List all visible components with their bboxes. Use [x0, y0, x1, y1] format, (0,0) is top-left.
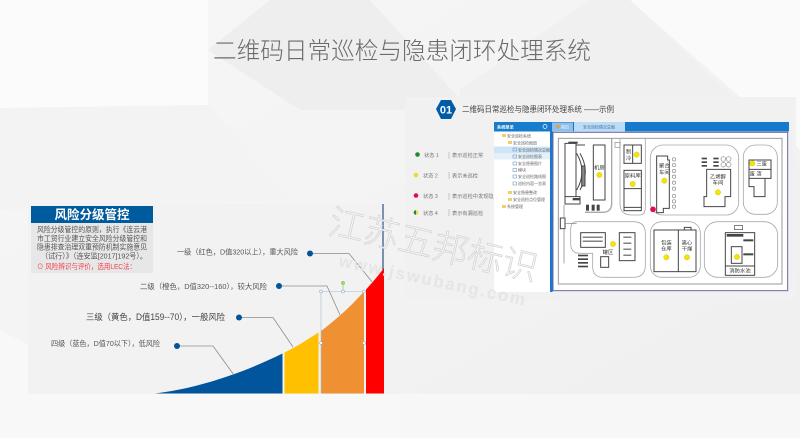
panel: risk grading — [28, 204, 388, 394]
map: plant layout: 冷 — [626, 154, 632, 162]
map: plant layout — [553, 132, 788, 291]
map: plant layout: 车间 — [713, 179, 723, 187]
sidebar: system menu: 安全巡检情况总图 — [518, 146, 550, 152]
map: plant layout: 三废 — [756, 159, 768, 167]
map: plant layout: 原料库 — [625, 172, 641, 180]
segment: blue level 4 — [155, 354, 282, 394]
tab bar: 安全巡检情况总图 — [583, 124, 615, 130]
heading: risk grading: 风险分级管控 — [54, 207, 130, 222]
text block: risk grading policy: 市工贸行业建立安全风险分级管控和 — [37, 233, 147, 243]
sidebar: system menu: 安全巡检点位管理 — [513, 196, 545, 202]
legend item 2: 表示未巡检 — [452, 172, 478, 180]
map: plant layout: 废 渣 — [750, 169, 762, 177]
sidebar: system menu: 模块 — [518, 166, 526, 172]
legend: status — [414, 151, 499, 217]
text block: risk grading policy: （试行）》（连安监[2017]192号）。 — [41, 250, 147, 260]
tanks — [672, 158, 676, 161]
callout: level 4: 四级（蓝色，D值70以下），低风险 — [51, 339, 161, 348]
sidebar: system menu: 安全隐患图片 — [518, 160, 542, 166]
tab bar — [550, 122, 789, 292]
legend item 3: 表示巡检中发现隐患 — [452, 192, 499, 200]
badge: 01: 01 — [440, 104, 452, 116]
map: plant layout: 包装 — [661, 238, 672, 246]
legend item 1: 表示巡检正常 — [452, 151, 483, 159]
panel: system example — [405, 97, 796, 300]
legend item 4: 状态 4 — [423, 209, 438, 217]
chart: risk curve — [155, 268, 384, 394]
sidebar: system menu: 系统管理 — [507, 203, 523, 209]
heading: example: 二维码日常巡检与隐患闭环处理系统 ——示例 — [462, 104, 614, 114]
map: plant layout: 车间 — [659, 168, 670, 176]
segment: orange level 2 — [321, 292, 364, 394]
callout: level 3: 三级（黄色，D值159--70），一般风险 — [86, 311, 225, 322]
sidebar: system menu — [494, 122, 550, 292]
map: plant layout: 离心 — [682, 238, 693, 246]
selection handles — [320, 281, 365, 393]
callout: level 2: 二级（橙色，D值320--160），较大风险 — [140, 282, 268, 291]
callout: level 2 — [140, 282, 340, 315]
map: plant layout: 制 — [626, 148, 631, 156]
title: 二维码日常巡检与隐患闭环处理系统 — [213, 38, 591, 65]
sidebar: system menu: 系统菜单 — [497, 124, 514, 130]
legend item 4: 表示有漏巡检 — [452, 209, 483, 217]
sidebar: system menu: 安全巡检图册 — [513, 140, 537, 146]
badge: 01 — [436, 100, 456, 119]
details — [568, 142, 578, 144]
text block: risk grading policy — [31, 223, 153, 273]
map: plant layout: 罐区 — [603, 248, 614, 256]
callout: level 1 — [177, 248, 373, 283]
legend item 1 — [415, 151, 483, 159]
callout: level 4 — [51, 339, 234, 375]
inspection points — [597, 172, 602, 178]
legend item 3: 状态 3 — [423, 192, 438, 200]
legend item 3 — [414, 192, 499, 200]
map: plant layout: 干燥 — [682, 244, 693, 252]
text block: risk grading policy: 风险分级管控的原则，执行《连云港 — [37, 224, 147, 234]
axis line — [382, 204, 384, 270]
legend item 1: 状态 1 — [424, 151, 439, 159]
sidebar: system menu: 巡检内容一览表 — [518, 180, 546, 186]
tab bar: 首页 — [561, 123, 569, 129]
segment: red level 1 — [366, 268, 384, 394]
map: plant layout: 消防水池 — [729, 266, 751, 274]
buildings — [565, 143, 580, 204]
text block: risk grading policy: 隐患排查治理双重预防机制实施意见 — [37, 242, 147, 252]
legend item 4 — [414, 209, 483, 217]
alert point — [650, 206, 656, 212]
watermark: 江苏五邦标识 — [325, 203, 542, 289]
segment: yellow level 3 — [284, 332, 318, 394]
sidebar: system menu: 安全隐患整改 — [513, 189, 537, 195]
sidebar: system menu: 安全巡检图表 — [518, 153, 542, 159]
callout: level 3 — [86, 311, 293, 347]
map: plant layout: 聚合 — [659, 161, 670, 169]
map: plant layout: 仓库 — [661, 244, 672, 252]
zones — [620, 138, 645, 215]
legend item 2: 状态 2 — [423, 172, 438, 180]
callout: level 1: 一级（红色，D值320以上），重大风险 — [177, 248, 299, 256]
watermark: www.jswubang.com — [336, 251, 527, 309]
map: plant layout: 乙烯醇 — [710, 172, 727, 180]
heading: risk grading — [31, 206, 153, 223]
sidebar: system menu: 安全巡检系统 — [507, 132, 531, 138]
legend item 2 — [414, 172, 478, 180]
sidebar: system menu: 安全巡检路线图 — [518, 173, 546, 179]
text block: risk grading policy: ⊙ 风险辨识与评价，选用LEC法： — [37, 261, 136, 271]
map labels: 机房 — [594, 163, 605, 171]
